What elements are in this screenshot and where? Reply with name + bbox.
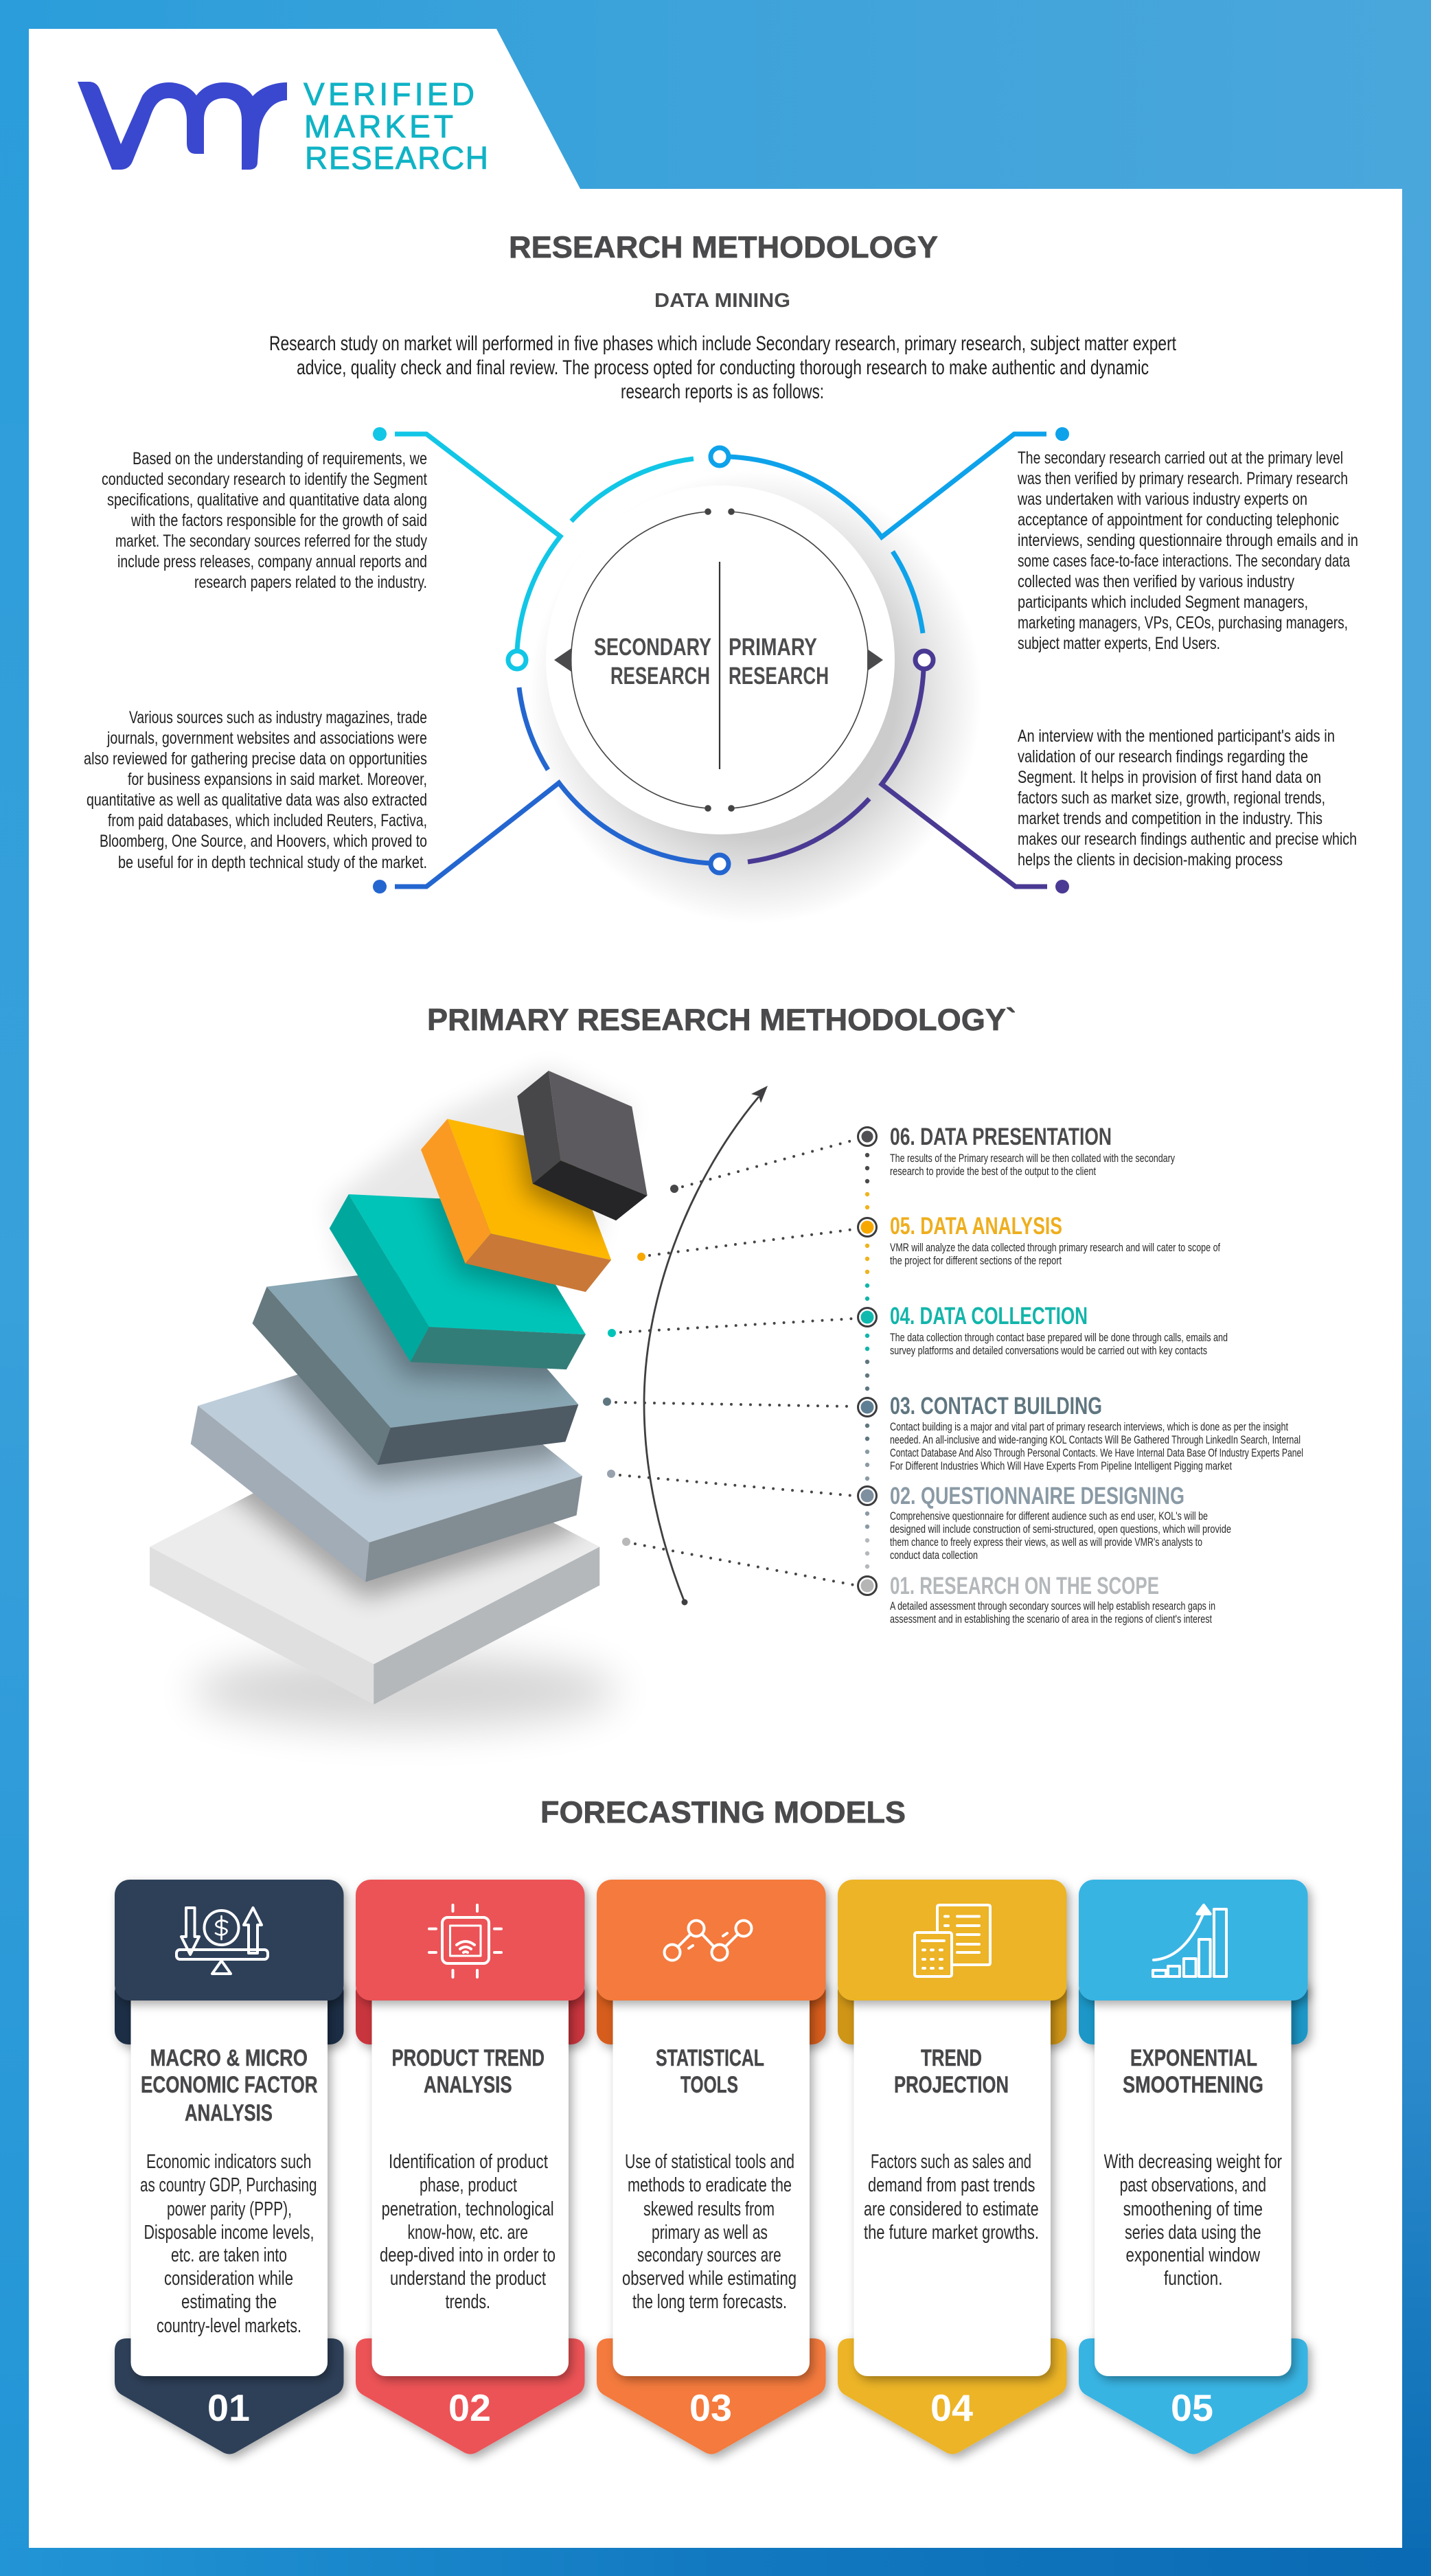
text block: secondary research, sources: quantitative as well as qualitative data was also extracted xyxy=(87,790,427,810)
card 03 white body xyxy=(613,1978,810,2376)
circular diagram: secondary and primary research xyxy=(373,427,1069,924)
text block: primary research, verification: The secondary research carried out at the primary level xyxy=(1018,448,1343,468)
step 02: questionnaire designing xyxy=(858,1483,1231,1562)
heading 05: 05. DATA ANALYSIS xyxy=(890,1213,1062,1240)
card 05 flaps and pennant xyxy=(1079,1978,1307,2454)
text block: secondary research, requirements: Based on the understanding of requirements, we xyxy=(133,449,427,468)
card 03 text: observed while estimating xyxy=(622,2268,797,2290)
block: dark xyxy=(517,1071,648,1220)
label: primary research: RESEARCH xyxy=(729,663,829,689)
card 03 title xyxy=(656,2045,764,2098)
card 03 header xyxy=(597,1880,825,2001)
soft shadow on background xyxy=(330,1067,632,1277)
text block: primary research, interview xyxy=(1018,727,1357,869)
card 03: statistical tools xyxy=(597,1880,825,2454)
card 04 text: demand from past trends xyxy=(868,2174,1035,2196)
text 01 xyxy=(890,1600,1215,1626)
logo wordmark: MARKET xyxy=(304,109,453,144)
curved growth arrow xyxy=(644,1086,768,1606)
card 04 header xyxy=(838,1880,1067,2001)
text block: primary research, verification: participants which included Segment managers, xyxy=(1018,593,1308,612)
card 02 text: understand the product xyxy=(390,2268,546,2290)
card 02 title: PRODUCT TREND xyxy=(391,2045,545,2071)
text block: secondary research, requirements xyxy=(102,449,427,592)
title: research methodology: RESEARCH METHODOLOGY xyxy=(509,231,938,264)
card 03 text: Use of statistical tools and xyxy=(625,2151,794,2173)
card 03 number: 03 xyxy=(689,2386,732,2429)
disc shadow xyxy=(529,470,982,924)
heading: forecasting models: FORECASTING MODELS xyxy=(540,1796,906,1830)
node 02 xyxy=(858,1486,876,1505)
card 01 title: ANALYSIS xyxy=(185,2100,273,2126)
text 05 xyxy=(890,1242,1220,1267)
card 02 text: deep-dived into in order to xyxy=(380,2244,556,2266)
cyan arc and connector xyxy=(373,427,694,669)
text block: secondary research, requirements: market. The secondary sources referred for the study xyxy=(115,532,427,551)
intro text: Research study on market will performed in five phases which include Secondary research, primary research, subject matter expert xyxy=(269,332,1177,355)
card 04 text xyxy=(864,2151,1039,2244)
floor shadow under stacked blocks xyxy=(192,1653,618,1729)
node 04 xyxy=(858,1308,876,1327)
card 01 number: 01 xyxy=(207,2386,250,2429)
card 05 header xyxy=(1079,1880,1307,2001)
icon: document and calculator xyxy=(915,1905,990,1976)
block: steel xyxy=(253,1270,578,1466)
heading: primary research methodology: PRIMARY RESEARCH METHODOLOGY` xyxy=(427,1003,1016,1037)
text block: primary research, verification: was undertaken with various industry experts on xyxy=(1017,490,1307,509)
card 02 header xyxy=(356,1880,585,2001)
card 04 white body xyxy=(854,1978,1051,2376)
text block: secondary research, sources: Various sources such as industry magazines, trade xyxy=(129,708,427,727)
text 06 xyxy=(890,1152,1176,1178)
text 01: assessment and in establishing the scenario of area in the regions of client's interest xyxy=(890,1613,1212,1626)
card 04 text: the future market growths. xyxy=(864,2222,1039,2244)
text 01: A detailed assessment through secondary sources will help establish research gaps in xyxy=(890,1600,1215,1612)
card 03 flaps and pennant xyxy=(597,1978,825,2454)
node 06 xyxy=(858,1128,876,1145)
text block: primary research, verification: interviews, sending questionnaire through emails and in xyxy=(1018,531,1358,550)
logo wordmark xyxy=(304,76,488,176)
text block: secondary research, sources: be useful for in depth technical study of the market. xyxy=(118,853,427,872)
text block: secondary research, sources: for business expansions in said market. Moreover, xyxy=(128,770,427,789)
text block: primary research, interview: helps the clients in decision-making process xyxy=(1018,850,1283,869)
text block: primary research, verification: subject matter experts, End Users. xyxy=(1018,634,1220,653)
card 03 text: secondary sources are xyxy=(637,2244,781,2266)
card 02 text: penetration, technological xyxy=(382,2198,554,2220)
card 03 text xyxy=(622,2151,797,2313)
card 05: exponential smoothening xyxy=(1079,1880,1307,2454)
card 01 text: etc. are taken into xyxy=(171,2244,287,2266)
card 02 title xyxy=(391,2045,545,2098)
text block: primary research, verification: collected was then verified by various industry xyxy=(1018,572,1294,591)
card 04 number: 04 xyxy=(930,2386,973,2429)
text 05: VMR will analyze the data collected through primary research and will cater to scope of xyxy=(890,1242,1220,1254)
node 01 xyxy=(858,1577,876,1595)
card 01 text: power parity (PPP), xyxy=(167,2198,292,2220)
block: yellow xyxy=(421,1119,611,1292)
text 02: them chance to freely express their views, as well as will provide VMR's analysts to xyxy=(890,1536,1202,1549)
text block: primary research, interview: factors such as market size, growth, regional trends, xyxy=(1018,788,1325,808)
text 03: needed. An all-inclusive and wide-ranging KOL Contacts Will Be Gathered Through LinkedIn Search, Internal xyxy=(890,1434,1301,1446)
intro text: research reports is as follows: xyxy=(621,380,824,403)
logo xyxy=(78,76,488,176)
card 05 text: With decreasing weight for xyxy=(1104,2151,1282,2173)
text 04: The data collection through contact base prepared will be done through calls, emails and xyxy=(890,1332,1228,1344)
card 04 flaps and pennant xyxy=(838,1978,1067,2454)
card 05 title: EXPONENTIAL xyxy=(1130,2045,1257,2071)
card 01 text xyxy=(140,2151,317,2337)
card 02 flaps and pennant xyxy=(356,1978,585,2454)
card 01 flaps and pennant xyxy=(115,1978,343,2454)
white disc xyxy=(546,486,895,834)
card 03 title: STATISTICAL xyxy=(656,2045,764,2071)
heading 03: 03. CONTACT BUILDING xyxy=(890,1393,1102,1420)
card 05 text: function. xyxy=(1164,2268,1222,2290)
card 03 title: TOOLS xyxy=(680,2072,738,2098)
text block: secondary research, requirements: research papers related to the industry. xyxy=(194,573,427,592)
text block: primary research, interview: market trends and competition in the industry. This xyxy=(1018,809,1323,828)
card 03 text: the long term forecasts. xyxy=(632,2291,787,2313)
step 04: data collection xyxy=(858,1303,1228,1357)
text 02 xyxy=(890,1510,1231,1562)
block: base xyxy=(150,1477,600,1705)
heading 01: 01. RESEARCH ON THE SCOPE xyxy=(890,1573,1159,1599)
card 02 text: Identification of product xyxy=(389,2151,548,2173)
block: teal xyxy=(330,1194,586,1369)
card 02: product trend analysis xyxy=(356,1880,585,2454)
card 04 text: are considered to estimate xyxy=(864,2198,1039,2220)
left pointer xyxy=(554,648,571,672)
card 01 text: estimating the xyxy=(181,2291,277,2313)
logo wordmark: RESEARCH xyxy=(305,140,488,176)
card 02 text: trends. xyxy=(446,2291,490,2313)
subtitle: data mining: DATA MINING xyxy=(654,290,790,312)
icon: chip with wifi xyxy=(429,1905,501,1977)
label: secondary research: SECONDARY xyxy=(594,634,711,661)
card 04: trend projection xyxy=(838,1880,1067,2454)
thin inner circle xyxy=(571,509,868,811)
intro text xyxy=(269,332,1177,403)
text 06: research to provide the best of the output to the client xyxy=(890,1165,1096,1178)
node 05 xyxy=(858,1218,876,1236)
card 02 number: 02 xyxy=(448,2386,491,2429)
label: primary research: PRIMARY xyxy=(729,634,817,661)
card 05 title: SMOOTHENING xyxy=(1123,2072,1263,2098)
card 01 header xyxy=(115,1880,343,2001)
text 03: Contact building is a major and vital part of primary research interviews, which is done as per the insight xyxy=(890,1421,1288,1433)
card 04 title xyxy=(894,2045,1009,2098)
label: secondary research: RESEARCH xyxy=(610,663,710,689)
blue arc and connector xyxy=(711,427,1069,633)
text 02: conduct data collection xyxy=(890,1549,978,1562)
label: secondary research xyxy=(594,634,711,689)
text 04 xyxy=(890,1332,1228,1357)
step 06: data presentation xyxy=(858,1124,1176,1178)
text block: primary research, interview: validation of our research findings regarding the xyxy=(1018,747,1308,766)
dotted leader lines xyxy=(616,1140,854,1585)
text block: secondary research, requirements: include press releases, company annual reports and xyxy=(117,552,427,571)
card 02 white body xyxy=(372,1978,569,2376)
card 01 text: Economic indicators such xyxy=(146,2151,311,2173)
text block: secondary research, requirements: with the factors responsible for the growth of said xyxy=(130,511,427,530)
card 03 text: primary as well as xyxy=(652,2222,768,2244)
card 01: macro and micro economic factor analysis xyxy=(115,1880,343,2454)
card 04 text: Factors such as sales and xyxy=(871,2151,1031,2173)
card 02 title: ANALYSIS xyxy=(424,2072,512,2098)
logo mark xyxy=(78,82,287,170)
card 01 title xyxy=(141,2045,318,2126)
stacked 3D blocks xyxy=(150,1067,648,1705)
text 06: The results of the Primary research will be then collated with the secondary xyxy=(890,1152,1176,1165)
text block: secondary research, sources: journals, government websites and associations were xyxy=(106,729,427,748)
text block: primary research, verification: was then verified by primary research. Primary research xyxy=(1017,469,1348,488)
step 01: research on the scope xyxy=(858,1573,1215,1626)
text 02: designed will include construction of semi-structured, open questions, which will provide xyxy=(890,1523,1231,1536)
heading 04: 04. DATA COLLECTION xyxy=(890,1303,1088,1330)
right pointer xyxy=(867,649,883,671)
leader start dots xyxy=(603,1185,678,1546)
text 03: For Different Industries Which Will Have Experts From Pipeline Intelligent Pigging market xyxy=(890,1460,1232,1472)
card 02 text xyxy=(380,2151,556,2313)
dark blue arc and connector xyxy=(373,687,729,893)
card 02 text: know-how, etc. are xyxy=(408,2222,528,2244)
heading 02: 02. QUESTIONNAIRE DESIGNING xyxy=(890,1483,1184,1509)
text block: primary research, interview: Segment. It helps in provision of first hand data on xyxy=(1018,768,1321,787)
card 01 text: consideration while xyxy=(164,2268,293,2290)
card 01 text: as country GDP, Purchasing xyxy=(140,2174,317,2196)
card 05 white body xyxy=(1095,1978,1291,2376)
text block: secondary research, sources xyxy=(84,708,427,872)
block: light blue xyxy=(191,1363,582,1582)
purple arc and connector xyxy=(748,651,1069,893)
intro text: advice, quality check and final review. The process opted for conducting thorough research to make authentic and dynamic xyxy=(297,356,1149,379)
text block: secondary research, requirements: specifications, qualitative and quantitative data along xyxy=(107,490,427,510)
card 01 title: MACRO & MICRO xyxy=(150,2045,308,2071)
heading 06: 06. DATA PRESENTATION xyxy=(890,1124,1112,1150)
step 05: data analysis xyxy=(858,1213,1220,1267)
text 02: Comprehensive questionnaire for different audience such as end user, KOL's will be xyxy=(890,1510,1208,1523)
text block: primary research, verification xyxy=(1017,448,1358,653)
card 01 text: country-level markets. xyxy=(157,2315,301,2337)
card 01 title: ECONOMIC FACTOR xyxy=(141,2072,318,2098)
card 05 text xyxy=(1104,2151,1282,2290)
text block: secondary research, sources: from paid databases, which included Reuters, Factiva, xyxy=(108,811,427,830)
card 05 number: 05 xyxy=(1171,2386,1213,2429)
text block: secondary research, requirements: conducted secondary research to identify the Segment xyxy=(102,470,427,489)
card 03 text: skewed results from xyxy=(643,2198,775,2220)
icon: balance scale with dollar xyxy=(176,1908,268,1974)
card 05 title xyxy=(1123,2045,1263,2098)
icon: connected nodes xyxy=(665,1920,751,1960)
icon: growth bars and curve xyxy=(1153,1905,1226,1976)
card 05 text: smoothening of time xyxy=(1123,2198,1263,2220)
card 04 title: TREND xyxy=(921,2045,982,2071)
card 02 text: phase, product xyxy=(420,2174,517,2196)
card 01 text: Disposable income levels, xyxy=(144,2222,314,2244)
text 03 xyxy=(890,1421,1303,1472)
label: primary research xyxy=(729,634,829,689)
logo wordmark: VERIFIED xyxy=(304,76,474,112)
card 01 white body xyxy=(130,1978,328,2376)
center divider xyxy=(719,562,720,769)
text 05: the project for different sections of the report xyxy=(890,1255,1062,1267)
card 05 text: past observations, and xyxy=(1120,2174,1266,2196)
text block: primary research, verification: acceptance of appointment for conducting telephonic xyxy=(1018,510,1339,529)
text block: primary research, interview: An interview with the mentioned participant's aids in xyxy=(1018,727,1335,746)
node 03 xyxy=(858,1398,876,1416)
card 05 text: exponential window xyxy=(1126,2244,1260,2266)
card 04 title: PROJECTION xyxy=(894,2072,1009,2098)
text 04: survey platforms and detailed conversations would be carried out with key contacts xyxy=(890,1345,1207,1357)
vertical dotted timeline xyxy=(865,1153,869,1569)
step 03: contact building xyxy=(858,1393,1303,1472)
text block: secondary research, sources: also reviewed for gathering precise data on opportunities xyxy=(84,749,427,768)
card 05 text: series data using the xyxy=(1125,2222,1261,2244)
text block: secondary research, sources: Bloomberg, One Source, and Hoovers, which proved to xyxy=(100,832,427,851)
card 03 text: methods to eradicate the xyxy=(628,2174,792,2196)
